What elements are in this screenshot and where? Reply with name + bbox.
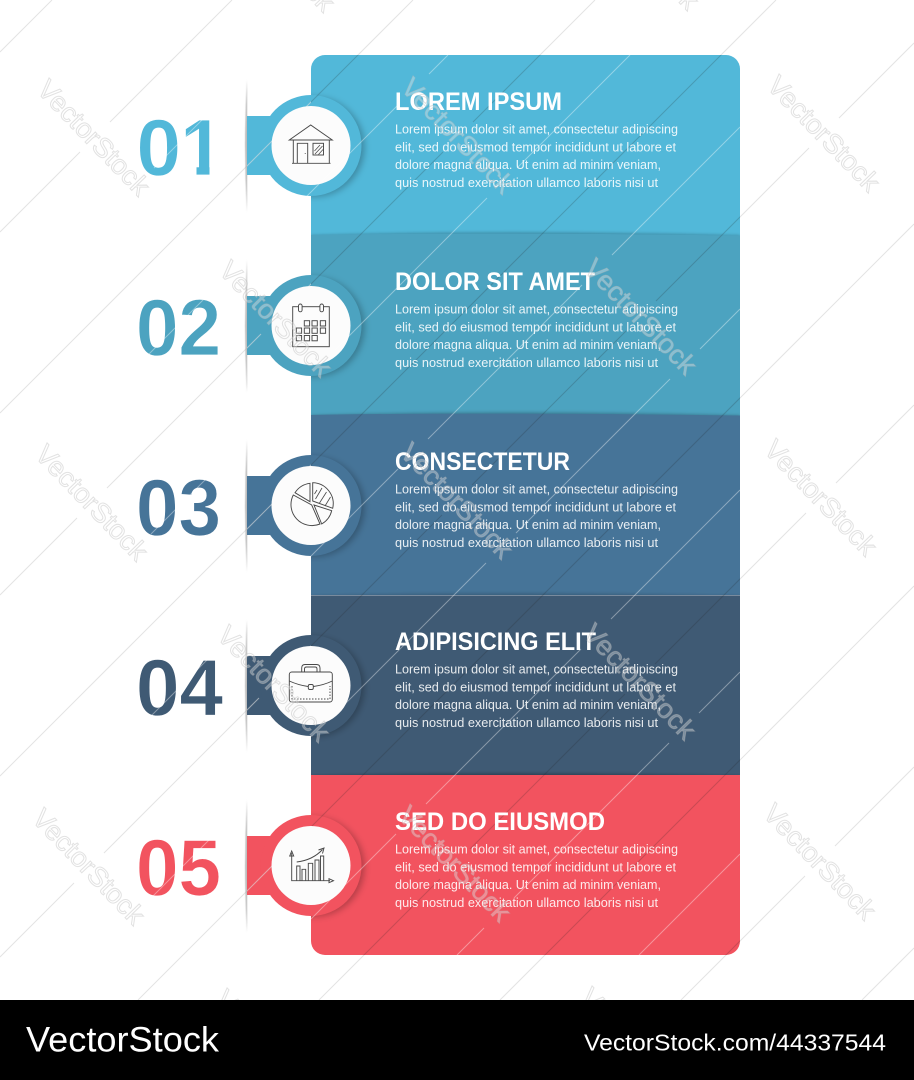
step 2 disk — [272, 286, 350, 365]
step 5 disk — [272, 826, 350, 905]
watermarks: VectorStock — [761, 70, 886, 198]
text block 4: dolore magna aliqua. Ut enim ad minim veniam, — [395, 697, 661, 712]
watermarks: VectorStock — [29, 439, 154, 567]
step 2 connector and ring — [245, 260, 362, 392]
number 04: 04 — [136, 643, 223, 732]
text block 4: Lorem ipsum dolor sit amet, consectetur adipiscing — [395, 662, 678, 676]
icon: pie chart — [291, 483, 333, 526]
text block 3: elit, sed do eiusmod tempor incididunt ut labore et — [395, 499, 676, 514]
text block 3 — [395, 448, 678, 550]
text block 2: elit, sed do eiusmod tempor incididunt ut labore et — [395, 319, 676, 334]
text block 2: Lorem ipsum dolor sit amet, consectetur adipiscing — [395, 302, 678, 316]
watermarks: VectorStock — [392, 800, 517, 928]
text block 3: Lorem ipsum dolor sit amet, consectetur adipiscing — [395, 482, 678, 496]
band 5 — [311, 775, 740, 955]
watermarks: VectorStock — [213, 255, 338, 383]
watermarks: VectorStock — [758, 434, 883, 562]
text block 1: quis nostrud exercitation ullamco laboris nisi ut — [395, 175, 658, 190]
watermarks: VectorStock — [394, 437, 519, 565]
watermarks: VectorStock — [577, 618, 702, 746]
watermarks: VectorStock — [395, 72, 520, 200]
band 4 — [311, 595, 740, 780]
icon: house — [289, 125, 332, 163]
step 1 disk — [272, 106, 350, 185]
step 3 connector and ring — [245, 440, 362, 572]
step 5 connector and ring — [245, 800, 362, 932]
number 05: 05 — [136, 823, 221, 912]
circle shadows on the panel — [311, 94, 368, 920]
text block 2: DOLOR SIT AMET — [395, 268, 595, 296]
text block 2 — [395, 268, 678, 370]
text block 4: elit, sed do eiusmod tempor incididunt ut labore et — [395, 679, 676, 694]
footer bar — [0, 1000, 914, 1080]
text block 4 — [395, 628, 678, 730]
step 1 connector and ring — [245, 80, 362, 212]
watermarks: VectorStock — [31, 74, 156, 202]
step 3 disk — [272, 466, 350, 545]
text block 1: dolore magna aliqua. Ut enim ad minim veniam, — [395, 157, 661, 172]
band 2 — [311, 234, 740, 420]
text block 1 — [395, 88, 678, 190]
icon: calendar — [293, 304, 329, 347]
text block 3: dolore magna aliqua. Ut enim ad minim veniam, — [395, 517, 661, 532]
watermarks: VectorStock — [26, 803, 151, 931]
icon: briefcase — [289, 664, 332, 702]
text block 5 — [395, 808, 678, 910]
number 01: 0 — [136, 103, 181, 192]
step 4 disk — [272, 646, 350, 725]
text block 5: SED DO EIUSMOD — [395, 808, 605, 836]
number 02: 02 — [136, 283, 221, 372]
text block 2: quis nostrud exercitation ullamco laboris nisi ut — [395, 355, 658, 370]
icon: growth chart — [290, 848, 334, 883]
text block 5: Lorem ipsum dolor sit amet, consectetur adipiscing — [395, 842, 678, 856]
text block 1: elit, sed do eiusmod tempor incididunt ut labore et — [395, 139, 676, 154]
panel: five stacked colour bands — [266, 55, 740, 955]
footer logo text: VectorStock — [26, 1020, 220, 1060]
text block 5: quis nostrud exercitation ullamco laboris nisi ut — [395, 895, 658, 910]
watermarks: VectorStock — [757, 798, 882, 926]
text block 3: quis nostrud exercitation ullamco laboris nisi ut — [395, 535, 658, 550]
step 4 connector and ring — [245, 620, 362, 752]
text block 1: LOREM IPSUM — [395, 88, 562, 116]
watermarks: VectorStock — [211, 620, 336, 748]
text block 5: dolore magna aliqua. Ut enim ad minim veniam, — [395, 877, 661, 892]
number 01: 1 — [180, 103, 224, 192]
text block 4: quis nostrud exercitation ullamco laboris nisi ut — [395, 715, 658, 730]
text block 5: elit, sed do eiusmod tempor incididunt ut labore et — [395, 859, 676, 874]
number 03: 03 — [136, 463, 221, 552]
text block 4: ADIPISICING ELIT — [395, 628, 596, 656]
watermarks: VectorStock — [578, 253, 703, 381]
footer image id: VectorStock.com/44337544 — [584, 1030, 886, 1056]
text block 3: CONSECTETUR — [395, 448, 570, 476]
text block 2: dolore magna aliqua. Ut enim ad minim veniam, — [395, 337, 661, 352]
band 1 — [311, 55, 740, 240]
band 3 — [311, 414, 740, 600]
number 01 — [136, 103, 226, 192]
text block 1: Lorem ipsum dolor sit amet, consectetur adipiscing — [395, 122, 678, 136]
